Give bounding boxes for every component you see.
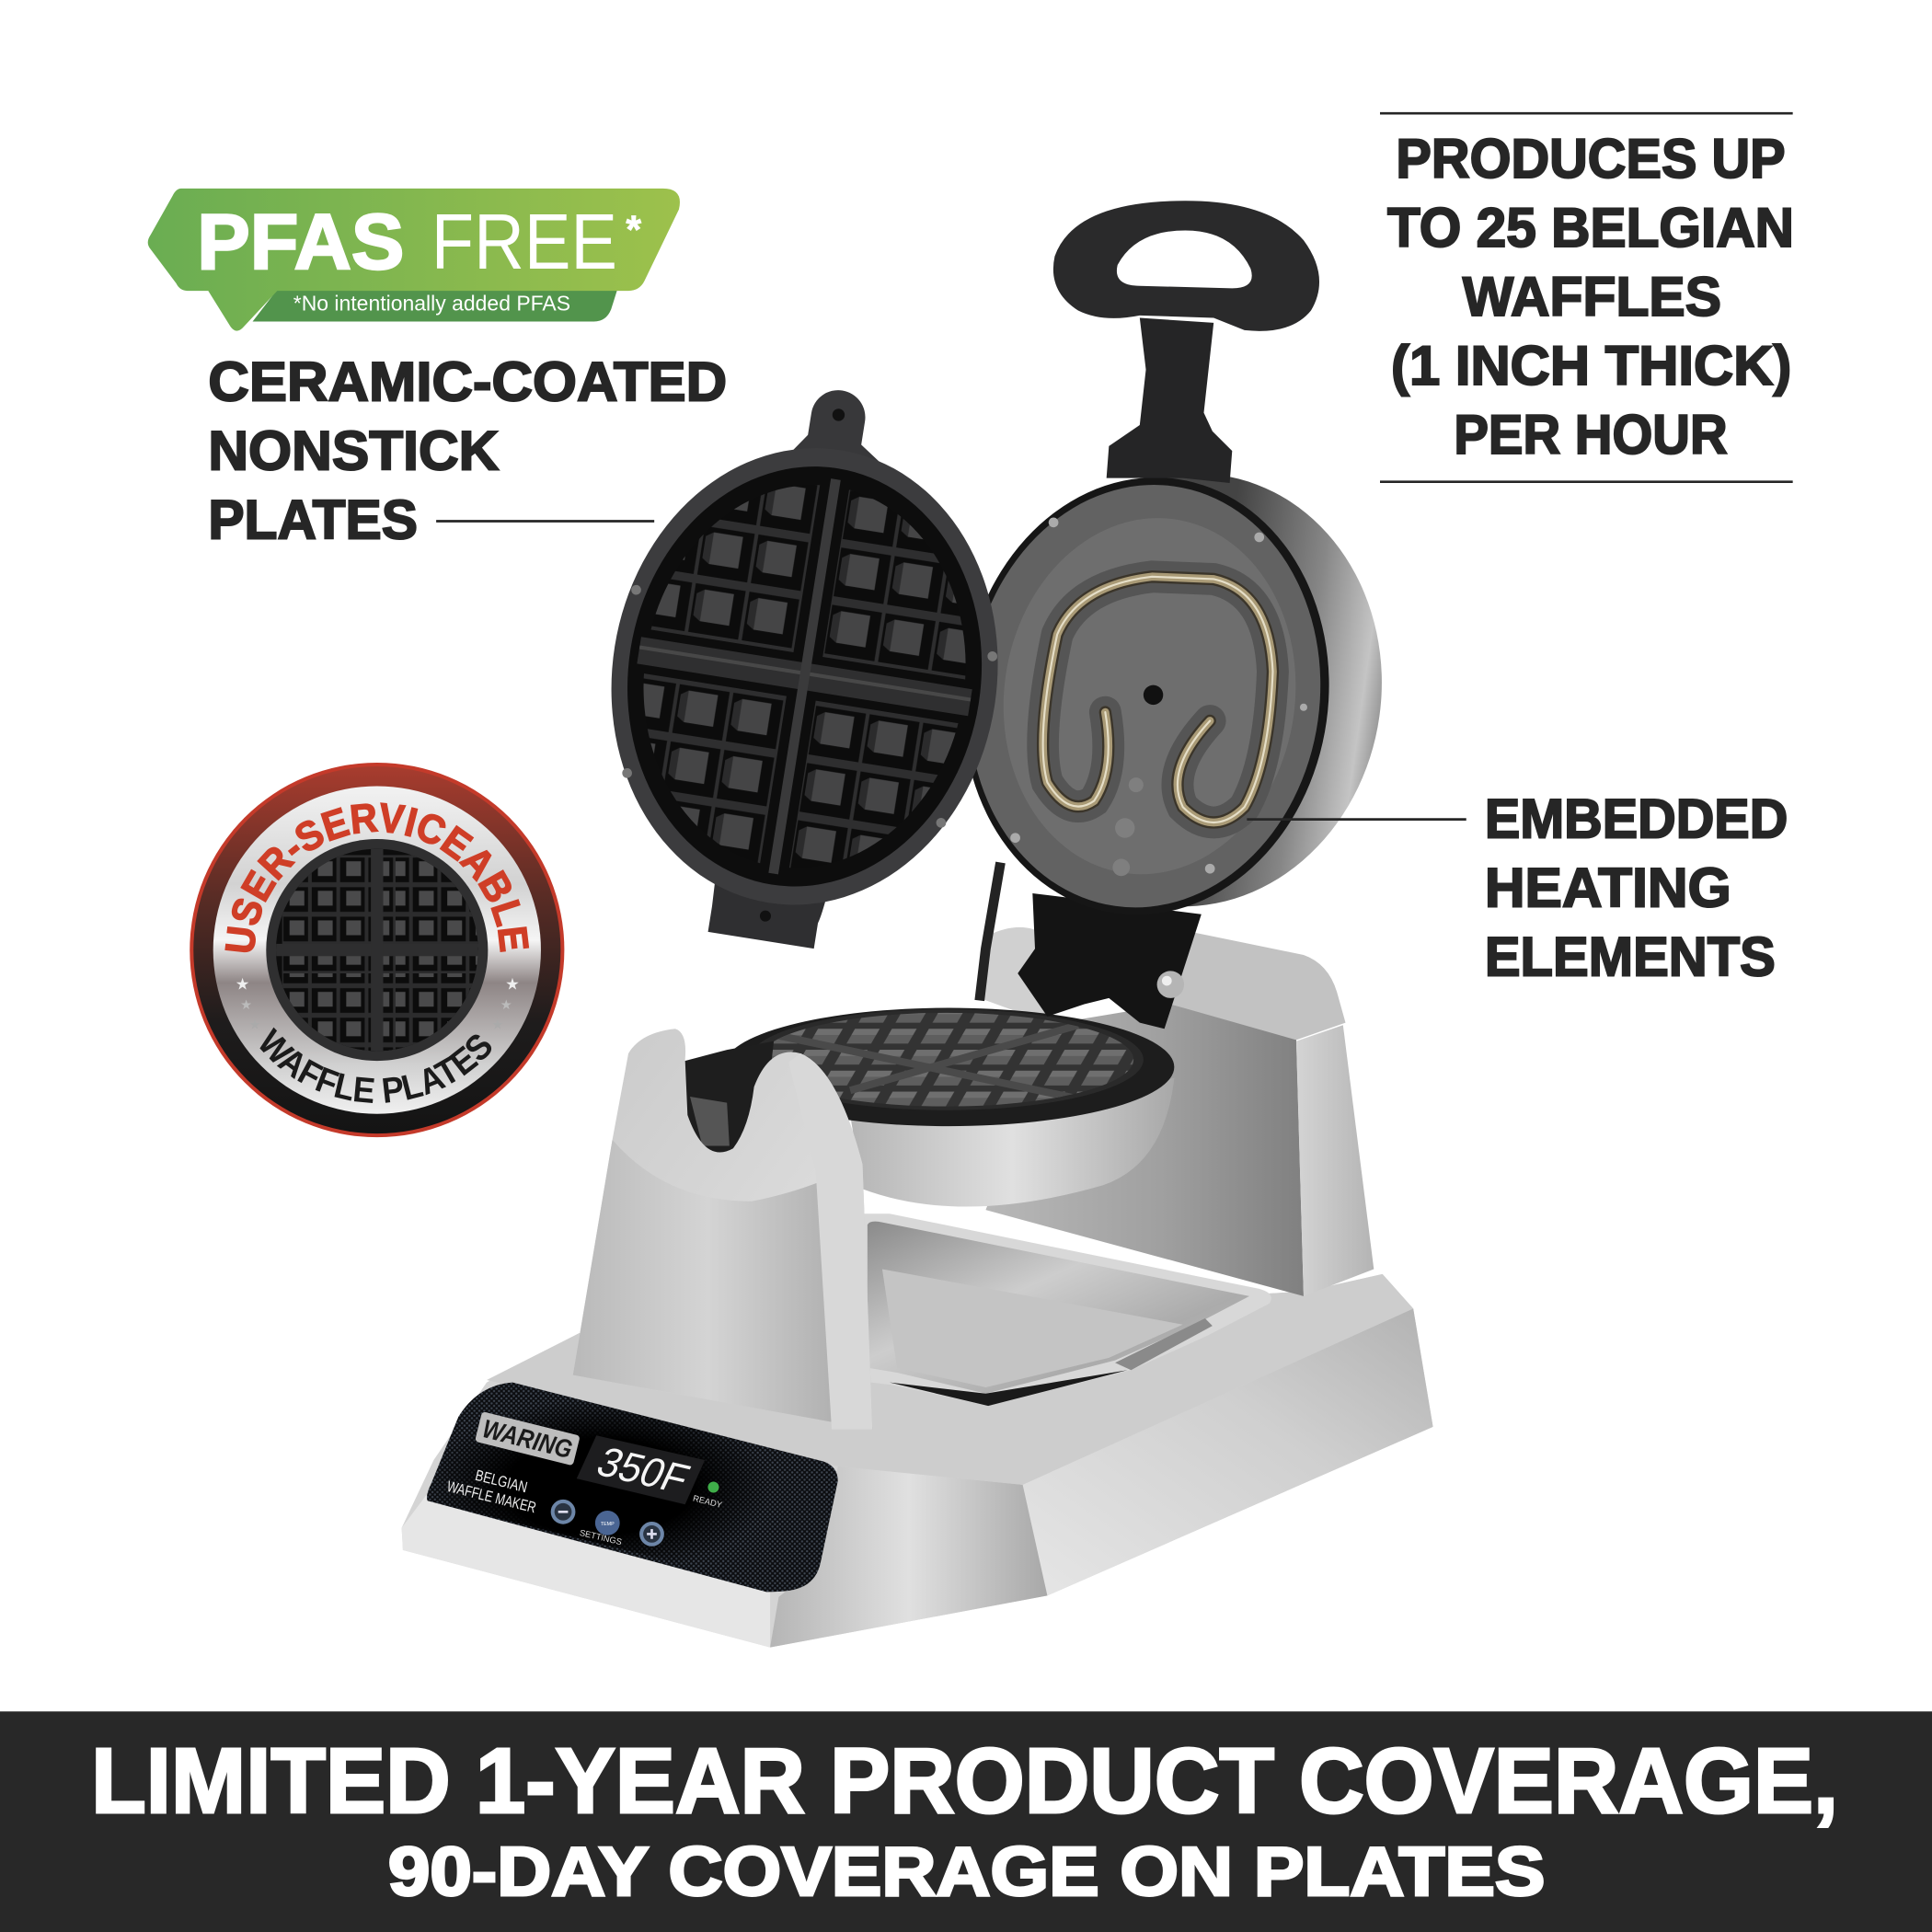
logo: Waring: WARING bbox=[479, 1414, 575, 1464]
callout: embedded heating elements bbox=[1247, 788, 1788, 988]
seal: user-serviceable waffle plates: WAFFLE PLATES bbox=[259, 1027, 491, 1103]
seal: user-serviceable waffle plates: ★ bbox=[249, 1018, 261, 1032]
callout: embedded heating elements: HEATING bbox=[1485, 857, 1731, 919]
callout: ceramic-coated nonstick plates bbox=[208, 350, 727, 550]
callout: produces up to 25 belgian waffles: TO 25 BELGIAN bbox=[1387, 196, 1794, 259]
callout: produces up to 25 belgian waffles: PER HOUR bbox=[1454, 403, 1728, 466]
lid handle bbox=[1053, 201, 1319, 483]
callout: ceramic-coated nonstick plates: PLATES bbox=[208, 488, 418, 550]
footer banner: coverage: 90-DAY COVERAGE ON PLATES bbox=[388, 1833, 1545, 1910]
footer banner: coverage bbox=[0, 1711, 1932, 1932]
settings buttons: SETTINGS bbox=[579, 1528, 623, 1547]
callout: produces up to 25 belgian waffles: PRODUCES UP bbox=[1396, 127, 1786, 190]
seal: user-serviceable waffle plates bbox=[190, 763, 565, 1137]
footer banner: coverage: LIMITED 1-YEAR PRODUCT COVERAGE, bbox=[91, 1730, 1838, 1833]
settings buttons bbox=[551, 1500, 664, 1547]
control panel bbox=[427, 1383, 838, 1592]
badge: PFAS free: * bbox=[626, 208, 641, 252]
hinge and power cord bbox=[980, 863, 1202, 1029]
seal: user-serviceable waffle plates: ★ bbox=[240, 998, 252, 1013]
drip tray bbox=[850, 1213, 1271, 1406]
model name bbox=[445, 1466, 538, 1516]
indicator: ready: READY bbox=[692, 1493, 724, 1510]
product: waffle maker bbox=[402, 201, 1433, 1648]
left tower bbox=[573, 1029, 872, 1430]
callout: produces up to 25 belgian waffles bbox=[1380, 113, 1794, 482]
badge: PFAS free bbox=[148, 189, 680, 331]
lower waffle pan bbox=[723, 1005, 1174, 1207]
right tower bbox=[980, 927, 1374, 1296]
lid interior with heating elements bbox=[935, 454, 1357, 938]
callout: produces up to 25 belgian waffles: WAFFLES bbox=[1463, 265, 1721, 328]
seal: user-serviceable waffle plates: USER-SERVICEABLE bbox=[224, 802, 530, 953]
badge: PFAS free: FREE bbox=[431, 198, 617, 286]
callout: embedded heating elements: ELEMENTS bbox=[1485, 926, 1776, 988]
badge: PFAS free: *No intentionally added PFAS bbox=[293, 292, 570, 316]
heating coil bbox=[1043, 577, 1272, 822]
removable upper plate bbox=[611, 390, 997, 949]
callout: embedded heating elements: EMBEDDED bbox=[1485, 788, 1788, 850]
base bbox=[402, 1274, 1433, 1648]
settings buttons: TEMP bbox=[601, 1522, 615, 1527]
temperature display: 350F bbox=[590, 1438, 696, 1502]
badge: PFAS free: PFAS bbox=[197, 198, 404, 286]
indicator: ready bbox=[692, 1481, 724, 1510]
seal: user-serviceable waffle plates: ★ bbox=[505, 974, 520, 993]
seal: user-serviceable waffle plates: ★ bbox=[491, 1018, 504, 1032]
callout: produces up to 25 belgian waffles: (1 INCH THICK) bbox=[1391, 334, 1791, 397]
model name: BELGIAN bbox=[474, 1466, 529, 1496]
callout: ceramic-coated nonstick plates: NONSTICK bbox=[208, 419, 499, 481]
seal: user-serviceable waffle plates: ★ bbox=[236, 974, 249, 993]
lid shell bbox=[971, 449, 1409, 931]
seal: user-serviceable waffle plates: ★ bbox=[500, 998, 512, 1013]
callout: ceramic-coated nonstick plates: CERAMIC-COATED bbox=[208, 350, 727, 412]
model name: WAFFLE MAKER bbox=[445, 1478, 538, 1516]
